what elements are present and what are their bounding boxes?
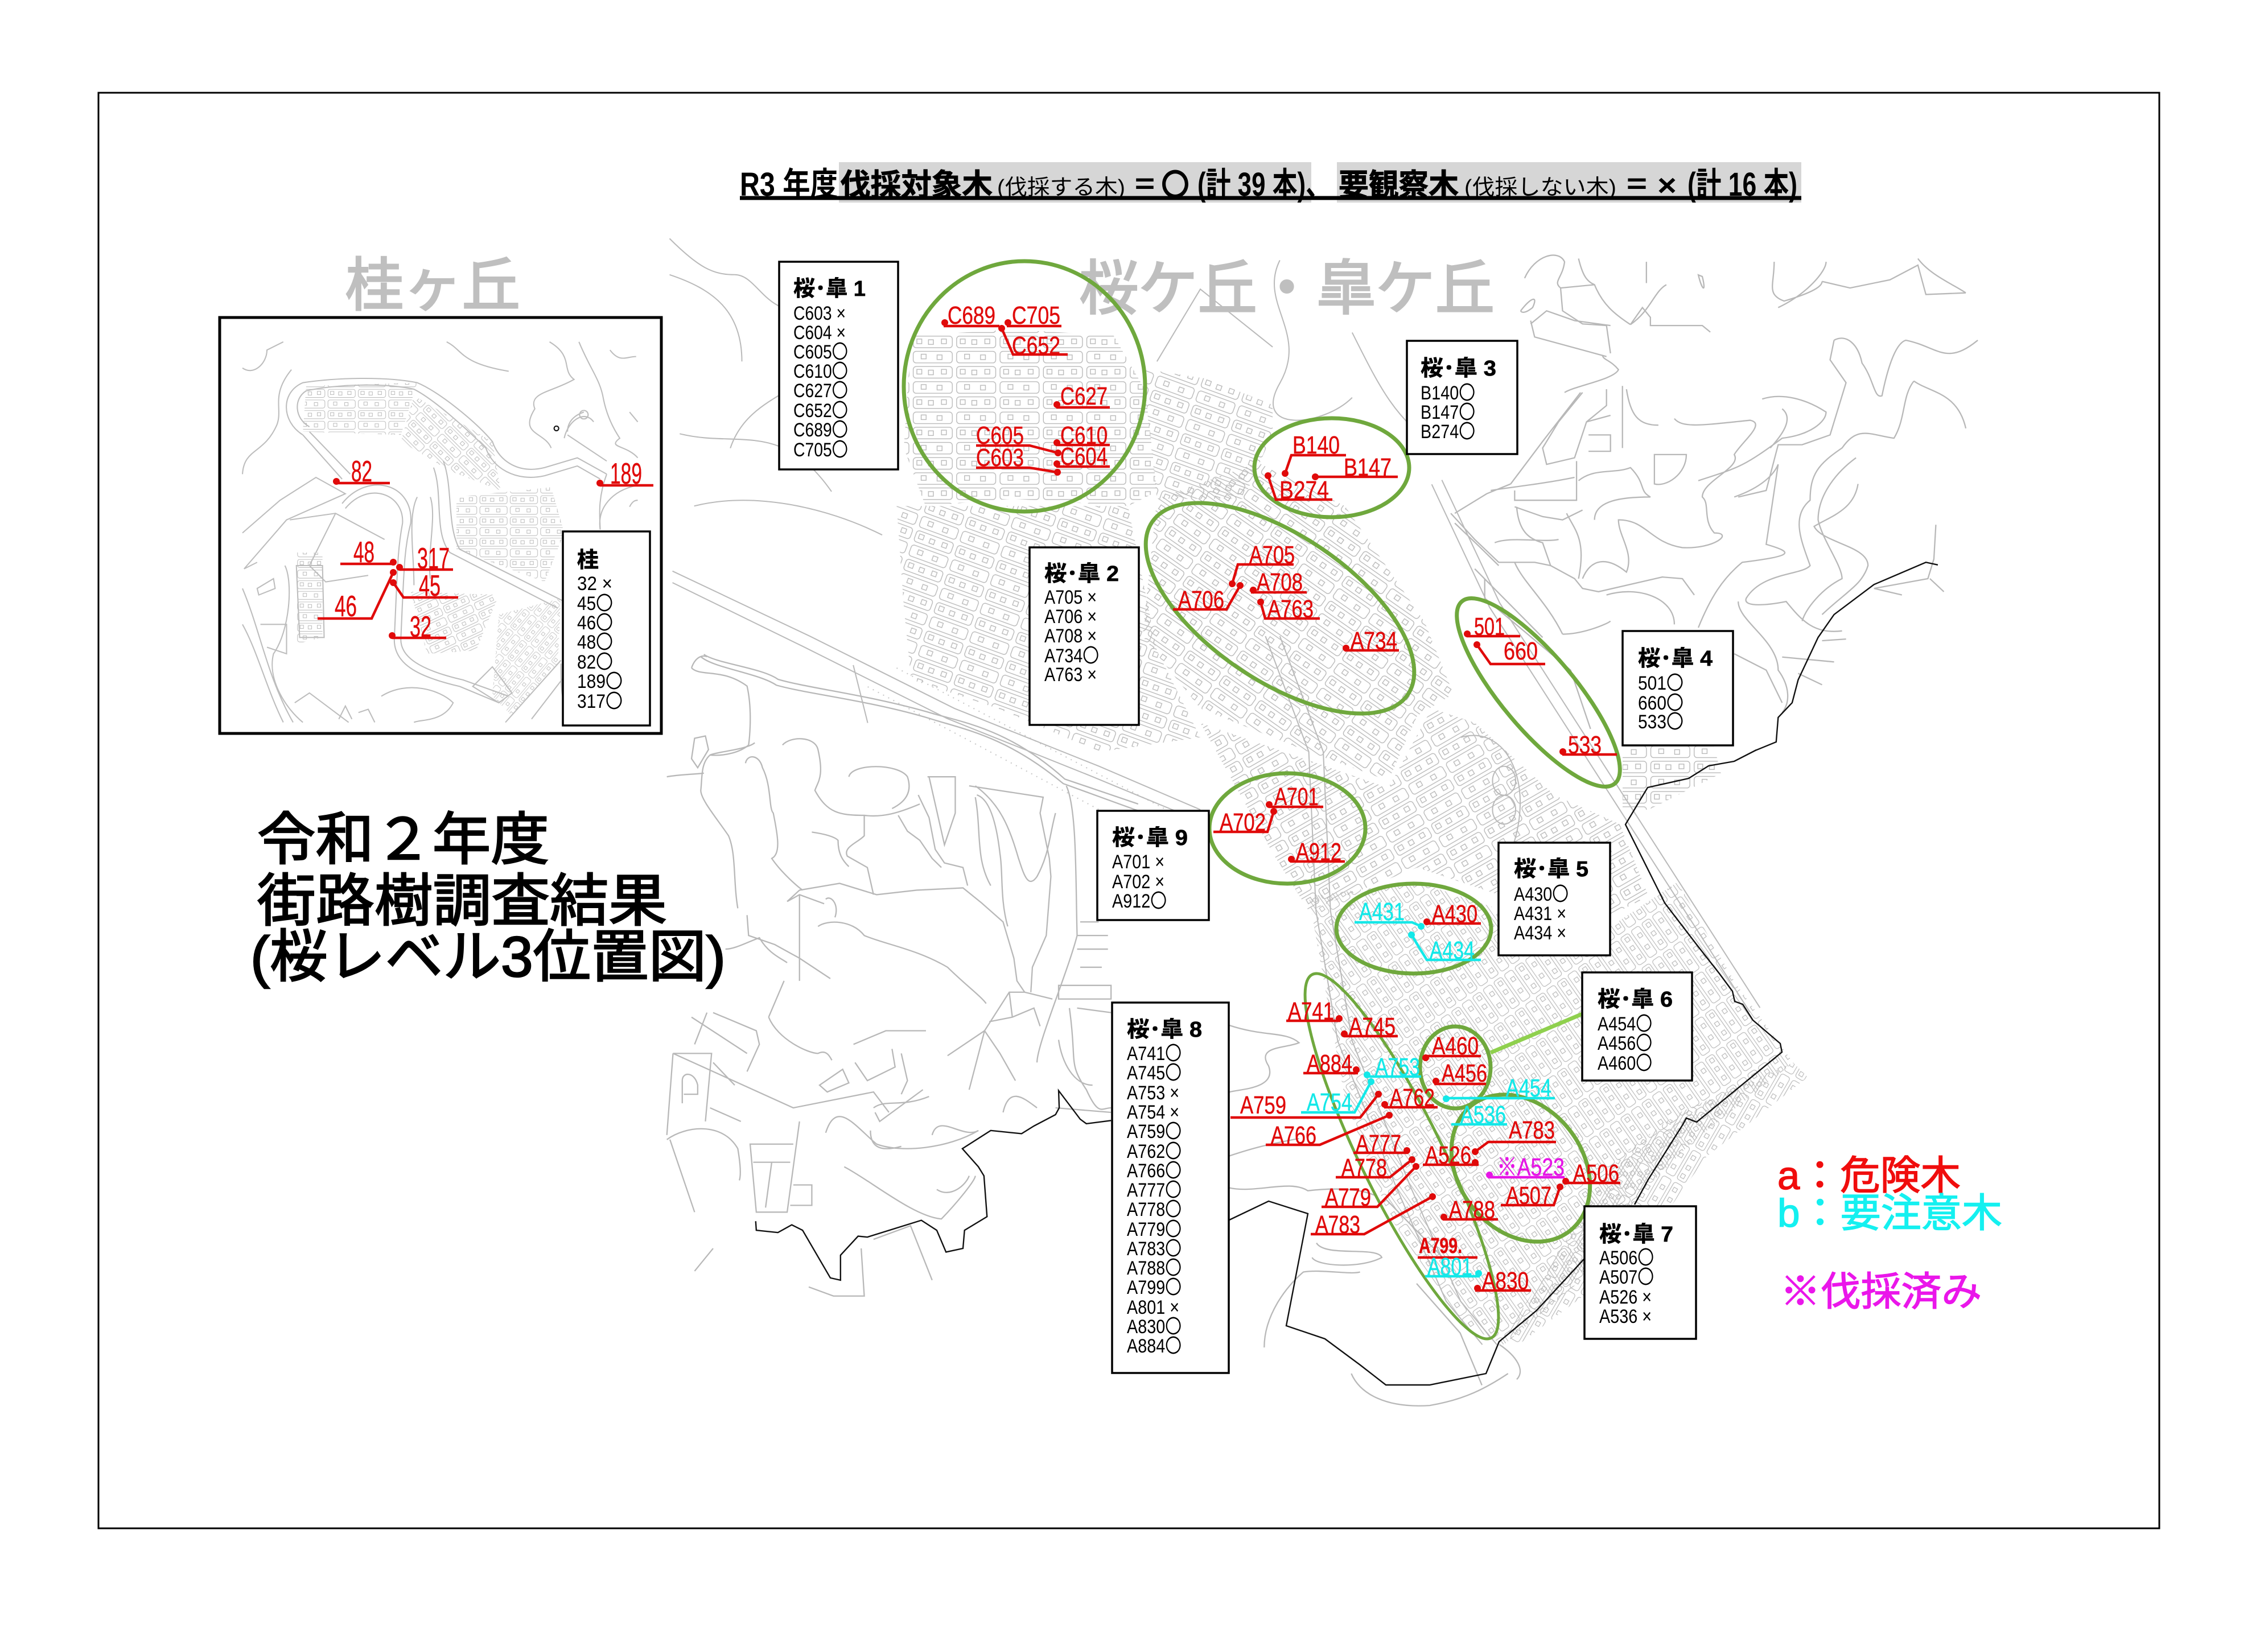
list box: 桜・皐9: 桜･皐 9 bbox=[1112, 826, 1188, 850]
list box: 桜・皐7: A507〇 bbox=[1599, 1267, 1654, 1288]
legend: ※伐採済み: ※伐採済み bbox=[1780, 1269, 1982, 1314]
label: A754: A754 bbox=[1307, 1088, 1352, 1116]
list box: 桜・皐1 bbox=[779, 262, 898, 469]
green survey group ellipses bbox=[904, 261, 1643, 1356]
label: B147: B147 bbox=[1344, 453, 1392, 481]
label: 189: 189 bbox=[610, 457, 642, 490]
list box: 桜・皐2: 桜･皐 2 bbox=[1044, 562, 1119, 586]
label: A702: A702 bbox=[1220, 809, 1266, 836]
legend box: 桂: 32 × bbox=[577, 573, 612, 595]
list box: 桜・皐7 bbox=[1584, 1206, 1696, 1339]
legend: b 要注意木: b：要注意木 bbox=[1777, 1191, 2002, 1235]
label: A783 upper: A783 bbox=[1509, 1116, 1555, 1144]
label: C605: C605 bbox=[976, 422, 1024, 450]
list box: 桜・皐8: A745〇 bbox=[1127, 1062, 1182, 1084]
list box: 桜・皐7: A536 × bbox=[1599, 1306, 1652, 1327]
list box: 桜・皐5: A434 × bbox=[1514, 922, 1566, 944]
label: 82: 82 bbox=[351, 455, 372, 488]
chart title with highlighted terms: 〇 bbox=[1161, 168, 1189, 203]
list box: 桜・皐9: A702 × bbox=[1112, 871, 1164, 893]
document title: 令和2年度 街路樹調査結果: 街路樹調査結果 bbox=[257, 869, 667, 933]
main map background bbox=[667, 238, 1978, 1406]
label: A460 bbox=[1422, 1032, 1481, 1061]
label: A460: A460 bbox=[1432, 1032, 1479, 1060]
label: A763: A763 bbox=[1267, 595, 1314, 623]
list box: 桜・皐7: A526 × bbox=[1599, 1286, 1652, 1308]
tree labels group 2 and 4 bbox=[1173, 541, 1617, 759]
list box: 桜・皐5 bbox=[1499, 843, 1610, 955]
tree labels group B bbox=[1265, 431, 1398, 504]
label: A506 bbox=[1562, 1160, 1620, 1187]
list box: 桜・皐8: A762〇 bbox=[1127, 1141, 1182, 1162]
list box: 桜・皐8: A777〇 bbox=[1127, 1180, 1182, 1201]
label: A759 bbox=[1230, 1091, 1382, 1119]
chart title with highlighted terms: (伐採しない木) bbox=[1464, 176, 1616, 200]
tree labels group 6, 7, 8 bbox=[1230, 997, 1620, 1295]
label: A456: A456 bbox=[1442, 1059, 1487, 1087]
list box: 桜・皐2: A734〇 bbox=[1044, 645, 1099, 667]
list box: 桜・皐2: A705 × bbox=[1044, 587, 1097, 608]
document title: 令和2年度 街路樹調査結果 bbox=[250, 808, 726, 989]
label: A708: A708 bbox=[1257, 568, 1303, 596]
label: C604: C604 bbox=[1060, 443, 1108, 471]
list box: 桜・皐8: A884〇 bbox=[1127, 1335, 1182, 1357]
label: B140: B140 bbox=[1293, 431, 1340, 459]
label: 317: 317 bbox=[417, 542, 450, 575]
chart title with highlighted terms: ＝ bbox=[1133, 168, 1157, 203]
label: A884: A884 bbox=[1307, 1050, 1352, 1078]
legend box: 桂: 46〇 bbox=[577, 612, 613, 634]
label: A779: A779 bbox=[1325, 1184, 1371, 1211]
label: A507: A507 bbox=[1506, 1182, 1551, 1210]
label: 533: 533 bbox=[1568, 731, 1602, 759]
list box: 桜・皐6 bbox=[1582, 972, 1692, 1081]
legend box: 桂: 189〇 bbox=[577, 671, 623, 692]
chart title with highlighted terms bbox=[740, 162, 1801, 203]
label: A912: A912 bbox=[1296, 838, 1341, 866]
label: C603: C603 bbox=[976, 444, 1024, 472]
list box: 桜・皐9 bbox=[1097, 811, 1209, 920]
label: 660: 660 bbox=[1504, 637, 1538, 665]
label: A536 bbox=[1451, 1101, 1507, 1129]
list box: 桜・皐3 bbox=[1407, 341, 1517, 454]
list box: 桜・皐5: A430〇 bbox=[1514, 884, 1569, 905]
chart title with highlighted terms: (計 39 本)、 bbox=[1197, 166, 1331, 203]
list box: 桜・皐2: A763 × bbox=[1044, 664, 1097, 686]
label: C652 bbox=[998, 325, 1068, 360]
west hills detail bbox=[667, 654, 1138, 1296]
label: 48: 48 bbox=[353, 536, 374, 569]
label: 48 bbox=[340, 536, 397, 569]
chart title with highlighted terms: 伐採対象木 bbox=[840, 168, 993, 203]
label: A706: A706 bbox=[1178, 586, 1224, 614]
label: 46 bbox=[318, 569, 397, 623]
label: A801: A801 bbox=[1427, 1253, 1472, 1281]
list box: 桜・皐8: A754 × bbox=[1127, 1102, 1179, 1123]
label: A766: A766 bbox=[1271, 1121, 1316, 1149]
list box: 桜・皐8: A741〇 bbox=[1127, 1043, 1182, 1065]
label: A799: A799. bbox=[1419, 1234, 1462, 1258]
legend box: 桂: 45〇 bbox=[577, 593, 613, 615]
inset map bbox=[242, 342, 638, 723]
label: A753 bbox=[1364, 1053, 1421, 1081]
list box: 桜・皐2: A708 × bbox=[1044, 625, 1097, 647]
label: C627: C627 bbox=[1060, 382, 1108, 410]
chart title with highlighted terms: ＝ bbox=[1624, 168, 1649, 203]
label: 317 bbox=[396, 542, 453, 575]
list box: 桜・皐8 bbox=[1112, 1003, 1229, 1373]
list box: 桜・皐1: C605〇 bbox=[793, 341, 848, 363]
heading: 桂ヶ丘: 桂ヶ丘 bbox=[345, 253, 520, 318]
label: A779 bbox=[1322, 1163, 1419, 1211]
chart title with highlighted terms: 要観察木 bbox=[1339, 168, 1459, 203]
north-east hills detail bbox=[1451, 255, 1978, 729]
list box: 桜・皐7: A506〇 bbox=[1599, 1247, 1654, 1269]
list box: 桜・皐1: C652〇 bbox=[793, 400, 848, 422]
label: A506: A506 bbox=[1573, 1160, 1619, 1187]
label: A734: A734 bbox=[1351, 627, 1397, 655]
list box: 桜・皐1: C627〇 bbox=[793, 380, 848, 402]
heading: 桜ケ丘・皐ケ丘: 桜ケ丘・皐ケ丘 bbox=[1079, 256, 1495, 322]
label: A759: A759 bbox=[1240, 1091, 1286, 1119]
label: C603 bbox=[976, 444, 1061, 476]
label: 189 bbox=[596, 457, 653, 490]
inset panel: 桂ヶ丘 bbox=[220, 317, 661, 733]
list box: 桜・皐6: A454〇 bbox=[1598, 1013, 1652, 1035]
label: A754 bbox=[1301, 1078, 1374, 1116]
list box: 桜・皐8: A830〇 bbox=[1127, 1316, 1182, 1338]
list box: 桜・皐1: C689〇 bbox=[793, 419, 848, 441]
list box: 桜・皐9: A912〇 bbox=[1112, 890, 1167, 912]
label: C705: C705 bbox=[1012, 302, 1060, 329]
label: 32: 32 bbox=[410, 611, 431, 644]
list box: 桜・皐9: A701 × bbox=[1112, 851, 1164, 873]
chart title with highlighted terms: (計 16 本) bbox=[1687, 166, 1797, 203]
label: A705: A705 bbox=[1249, 541, 1295, 569]
colour legend bbox=[1777, 1153, 2002, 1314]
label: 660 bbox=[1473, 637, 1545, 665]
list box: 桜・皐4: 533〇 bbox=[1638, 711, 1683, 733]
label: A745: A745 bbox=[1349, 1013, 1396, 1041]
label: A434: A434 bbox=[1430, 937, 1475, 964]
list box: 桜・皐2: A706 × bbox=[1044, 606, 1097, 628]
tree labels group 9 and 5 bbox=[1213, 783, 1481, 964]
list box: 桜・皐1: 桜･皐 1 bbox=[793, 277, 866, 301]
label: 45 bbox=[390, 570, 458, 603]
list box: 桜・皐4 bbox=[1623, 631, 1733, 745]
outer page frame bbox=[98, 93, 2159, 1528]
label: A778: A778 bbox=[1341, 1154, 1387, 1182]
label: A454: A454 bbox=[1506, 1074, 1551, 1102]
south hills detail bbox=[1229, 1025, 1520, 1406]
chart title with highlighted terms: (伐採する木) bbox=[997, 176, 1125, 200]
label: A830: A830 bbox=[1482, 1267, 1529, 1295]
label: A741: A741 bbox=[1288, 997, 1334, 1025]
document title: 令和2年度 街路樹調査結果: (桜レベル3位置図) bbox=[250, 925, 726, 989]
tree labels group C bbox=[941, 302, 1110, 476]
label: A783 lower: A783 bbox=[1315, 1211, 1360, 1239]
list box: 桜・皐7: 桜･皐 7 bbox=[1599, 1223, 1673, 1247]
administrative boundary line bbox=[756, 562, 1938, 1385]
list box: 桜・皐6: 桜･皐 6 bbox=[1598, 988, 1673, 1012]
legend box: 桂: 桂 bbox=[577, 549, 599, 572]
label: C605 bbox=[976, 422, 1061, 456]
list box: 桜・皐8: A788〇 bbox=[1127, 1257, 1182, 1279]
label: A701: A701 bbox=[1274, 783, 1319, 811]
list box: 桜・皐8: A801 × bbox=[1127, 1297, 1179, 1318]
label: A705 bbox=[1229, 541, 1295, 587]
label: 32 bbox=[389, 611, 446, 644]
label: A536: A536 bbox=[1460, 1101, 1506, 1129]
list box: 桜・皐1: C603 × bbox=[793, 303, 846, 324]
legend box: 桂 bbox=[563, 531, 650, 725]
label: A456 bbox=[1433, 1059, 1487, 1087]
list box: 桜・皐3: B140〇 bbox=[1421, 382, 1475, 404]
list box: 桜・皐6: A460〇 bbox=[1598, 1053, 1652, 1074]
list box: 桜・皐6: A456〇 bbox=[1598, 1033, 1652, 1054]
chart title with highlighted terms: × bbox=[1657, 168, 1677, 203]
list box: 桜・皐5: 桜･皐 5 bbox=[1514, 857, 1588, 881]
legend box: 桂: 317〇 bbox=[577, 691, 623, 712]
label: A454 bbox=[1443, 1074, 1555, 1102]
label: A762: A762 bbox=[1390, 1084, 1435, 1112]
list box: 桜・皐4: 桜･皐 4 bbox=[1638, 647, 1713, 671]
list box: 桜・皐3: 桜･皐 3 bbox=[1421, 357, 1496, 381]
list box: 桜・皐8: A778〇 bbox=[1127, 1199, 1182, 1220]
list box: 桜・皐8: A779〇 bbox=[1127, 1219, 1182, 1240]
label: A788: A788 bbox=[1449, 1196, 1495, 1224]
list box: 桜・皐8: A753 × bbox=[1127, 1082, 1179, 1104]
label: 45: 45 bbox=[419, 570, 441, 603]
legend: a 危険木: a：危険木 bbox=[1777, 1153, 1961, 1198]
label: 46: 46 bbox=[335, 590, 357, 623]
town roads, north-west top contours and south detail bbox=[669, 238, 1760, 1345]
label: B140 bbox=[1282, 431, 1346, 477]
list box: 桜・皐2 bbox=[1030, 547, 1139, 725]
label: C610: C610 bbox=[1060, 422, 1108, 450]
list box: 桜・皐5: A431 × bbox=[1514, 903, 1566, 925]
list box: 桜・皐8: 桜･皐 8 bbox=[1127, 1018, 1202, 1042]
label: A783 upper bbox=[1472, 1116, 1556, 1155]
label: B274 bbox=[1265, 472, 1332, 504]
label: 501: 501 bbox=[1474, 613, 1505, 641]
document title: 令和2年度 街路樹調査結果: 令和２年度 bbox=[257, 808, 549, 872]
list box: 桜・皐8: A766〇 bbox=[1127, 1160, 1182, 1182]
list box: 桜・皐8: A799〇 bbox=[1127, 1277, 1182, 1298]
label: B274: B274 bbox=[1279, 476, 1329, 504]
list box: 桜・皐8: A759〇 bbox=[1127, 1121, 1182, 1143]
list box: 桜・皐1: C604 × bbox=[793, 322, 846, 344]
label: A434 bbox=[1408, 931, 1481, 964]
legend box: 桂: 82〇 bbox=[577, 651, 613, 673]
label: C689: C689 bbox=[948, 302, 995, 329]
label: A526: A526 bbox=[1425, 1141, 1471, 1169]
chart title with highlighted terms: R3 年度 bbox=[740, 166, 838, 203]
label: ※A523: ※A523 bbox=[1497, 1153, 1565, 1181]
legend box: 桂: 48〇 bbox=[577, 632, 613, 653]
label: C652: C652 bbox=[1012, 332, 1060, 360]
list box: 桜・皐1: C610〇 bbox=[793, 361, 848, 382]
label: B147 bbox=[1312, 453, 1398, 481]
list box: 桜・皐8: A783〇 bbox=[1127, 1238, 1182, 1260]
label: A783 lower bbox=[1311, 1193, 1436, 1239]
label: A430: A430 bbox=[1432, 900, 1477, 928]
list box: 桜・皐3: B274〇 bbox=[1421, 421, 1475, 443]
label: 82 bbox=[333, 455, 390, 488]
label: A777: A777 bbox=[1356, 1130, 1401, 1158]
list box: 桜・皐1: C705〇 bbox=[793, 439, 848, 461]
label: A431: A431 bbox=[1359, 898, 1405, 926]
town blocks bbox=[896, 329, 1808, 1345]
list box: 桜・皐4: 501〇 bbox=[1638, 673, 1683, 694]
list box: 桜・皐3: B147〇 bbox=[1421, 402, 1475, 423]
label: A766 bbox=[1266, 1112, 1393, 1149]
list box: 桜・皐4: 660〇 bbox=[1638, 692, 1683, 714]
label: A753: A753 bbox=[1375, 1053, 1420, 1081]
